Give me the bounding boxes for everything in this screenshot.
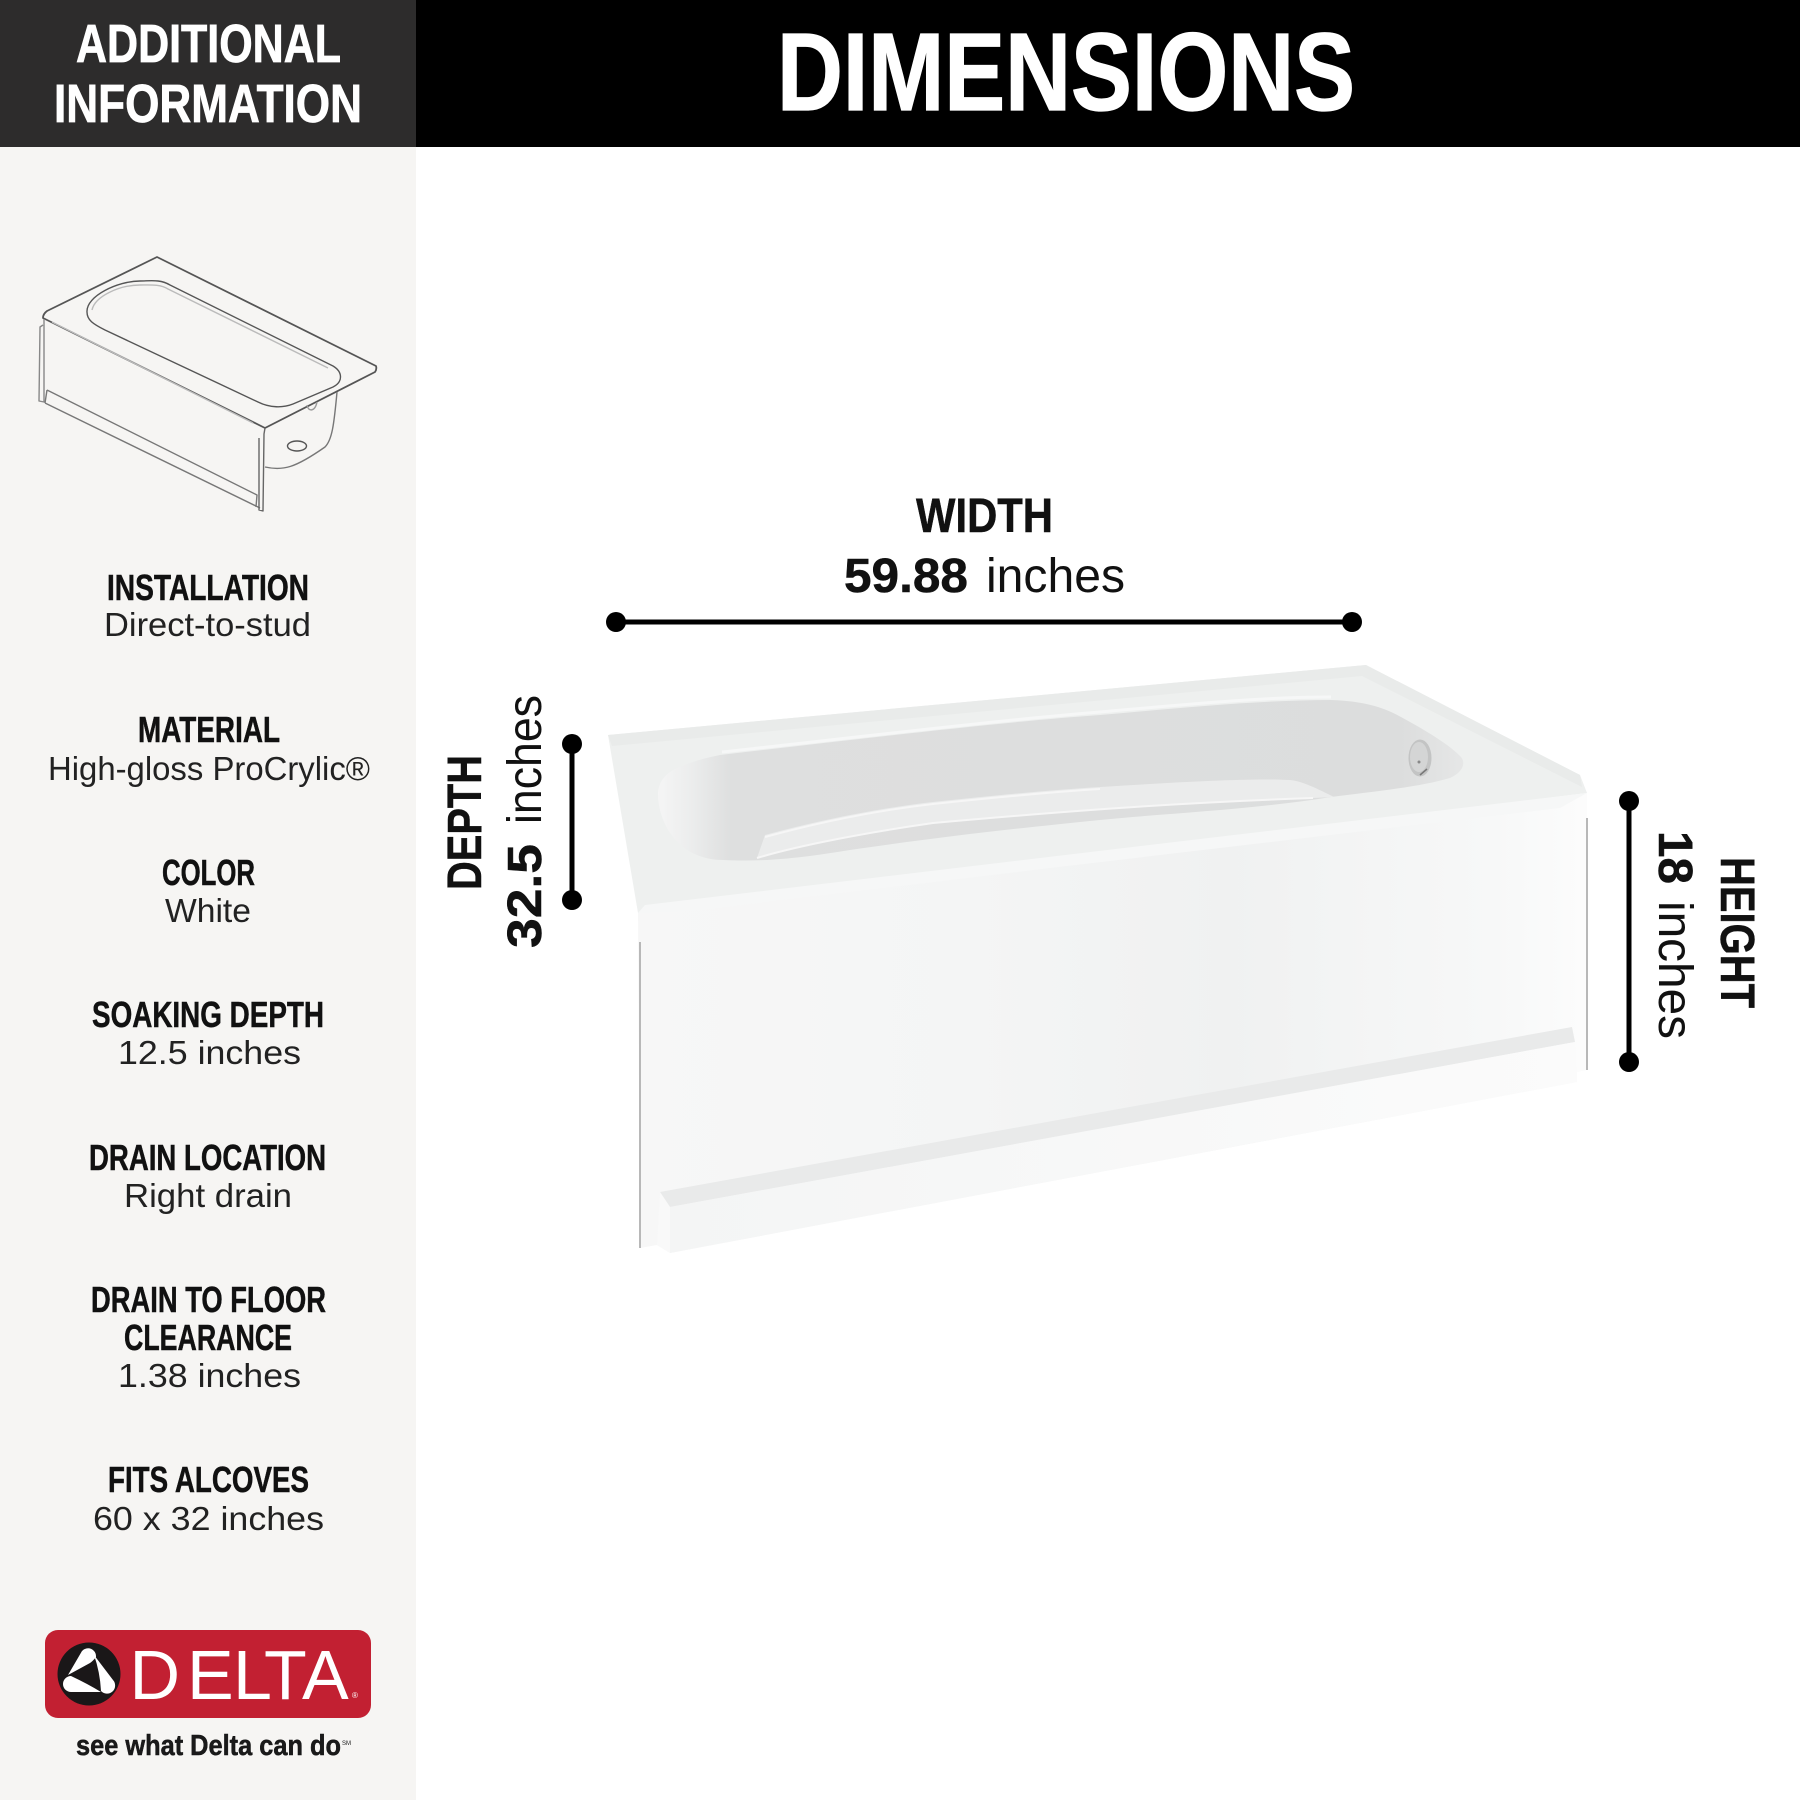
spec: color: COLOR <box>162 852 255 893</box>
spec: drain to floor clearance: DRAIN TO FLOOR <box>91 1279 326 1320</box>
bathtub illustration <box>608 665 1587 1253</box>
height label <box>1648 831 1763 1039</box>
spec: fits alcoves: FITS ALCOVES <box>108 1459 309 1500</box>
apron panel <box>638 793 1587 1253</box>
delta logo <box>45 1630 371 1762</box>
ledge highlights <box>757 789 1313 858</box>
spec: soaking depth: 12.5 inches <box>118 1034 301 1071</box>
height label: 18 <box>1648 831 1701 884</box>
height label: HEIGHT <box>1710 857 1763 1008</box>
spec: soaking depth <box>92 994 324 1071</box>
delta logo: SM <box>342 1741 351 1747</box>
spec: fits alcoves <box>93 1459 324 1537</box>
spec: drain location: Right drain <box>124 1177 292 1214</box>
back rim ridge <box>608 665 1582 787</box>
groove shadow <box>660 1027 1575 1207</box>
delta logo: ® <box>352 1691 358 1700</box>
spec: color: White <box>165 892 251 929</box>
spec: soaking depth: SOAKING DEPTH <box>92 994 324 1035</box>
apron edge lines <box>640 818 1587 1248</box>
lip left end <box>657 1192 670 1253</box>
header: additional information: INFORMATION <box>54 74 362 134</box>
depth label <box>439 695 552 948</box>
spec: drain location: DRAIN LOCATION <box>89 1137 326 1178</box>
height label: inches <box>1648 901 1701 1039</box>
delta logo: see what Delta can do <box>76 1730 341 1762</box>
basin <box>658 700 1463 861</box>
header: additional information <box>0 0 416 147</box>
basin rim highlight <box>722 697 1331 752</box>
apron lower lip <box>670 1042 1577 1253</box>
header: dimensions title <box>416 0 1800 147</box>
spec: material: High-gloss ProCrylic® <box>48 750 370 787</box>
header: additional information: ADDITIONAL <box>76 14 341 74</box>
spec: drain to floor clearance: 1.38 inches <box>118 1357 301 1394</box>
spec: installation <box>104 567 311 643</box>
depth label: DEPTH <box>439 755 492 890</box>
spec: color <box>162 852 255 929</box>
delta logo: DELTA <box>130 1636 349 1714</box>
spec: material <box>48 709 370 787</box>
width label: 59.88 <box>844 550 968 603</box>
overflow drain <box>1408 740 1432 776</box>
width label: WIDTH <box>916 490 1053 543</box>
width label: inches <box>986 550 1125 603</box>
spec: material: MATERIAL <box>138 709 280 750</box>
sidebar panel <box>0 147 416 1800</box>
spec: drain to floor clearance: CLEARANCE <box>124 1317 292 1358</box>
depth label: inches <box>499 695 552 824</box>
spec: drain to floor clearance <box>91 1279 326 1394</box>
rim front band <box>638 793 1587 913</box>
tub rim deck <box>608 665 1587 913</box>
width dimension line <box>606 612 1362 632</box>
icon: tub line drawing <box>39 257 376 511</box>
spec: installation: Direct-to-stud <box>104 606 311 643</box>
width label <box>844 490 1125 603</box>
height dimension line <box>1619 791 1639 1072</box>
depth label: 32.5 <box>499 844 552 948</box>
spec: drain location <box>89 1137 326 1214</box>
spec: fits alcoves: 60 x 32 inches <box>93 1500 324 1537</box>
depth dimension line <box>562 734 582 910</box>
seat ledge <box>757 779 1334 858</box>
spec: installation: INSTALLATION <box>107 567 309 608</box>
header: dimensions title: DIMENSIONS <box>777 11 1355 134</box>
